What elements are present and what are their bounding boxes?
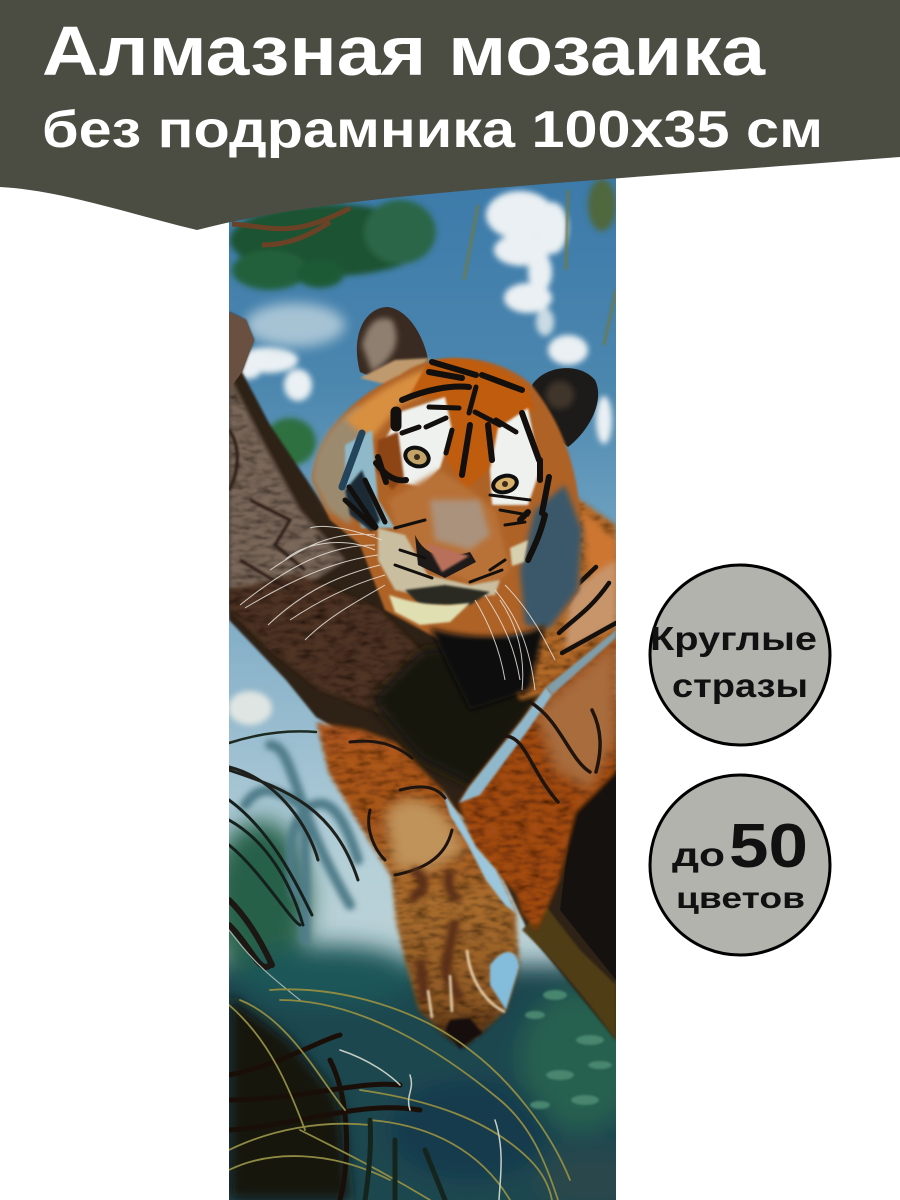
badge: up to 50 colours — [650, 775, 830, 955]
palm fronds — [229, 731, 358, 1000]
foreground brown fronds — [229, 989, 570, 1200]
top foliage — [230, 179, 616, 466]
tiger ears — [357, 307, 598, 447]
upper lip — [378, 528, 500, 600]
orange patch left of eye — [376, 432, 404, 490]
white patches — [345, 397, 540, 528]
distant palm — [245, 745, 358, 940]
nose — [415, 535, 476, 578]
dark left cheek — [345, 470, 380, 532]
chin — [389, 595, 470, 625]
orange forehead — [410, 359, 535, 490]
stripes — [342, 362, 549, 582]
left foreleg and paw — [317, 723, 519, 1048]
grey left mane — [309, 404, 362, 526]
badge: round rhinestones — [650, 565, 830, 745]
tiger head — [312, 358, 582, 710]
trunk — [229, 312, 616, 1040]
jungle backdrop — [229, 803, 616, 1200]
sky — [229, 175, 616, 995]
tiger picture — [229, 178, 616, 1200]
blue right cheek — [520, 485, 582, 628]
header band — [0, 0, 900, 230]
head base — [312, 358, 580, 640]
branches — [232, 208, 350, 245]
badge: up to 50 colours: до — [672, 836, 725, 873]
badge: round rhinestones: стразы — [672, 667, 808, 704]
jungle leaves — [525, 990, 612, 1109]
title line 2: без подрамника 100х35 см — [42, 101, 823, 159]
whiskers — [240, 526, 555, 690]
pale right cheek spot — [510, 540, 528, 566]
muzzle — [388, 470, 510, 590]
badge: up to 50 colours: 50 — [729, 812, 808, 881]
clouds — [228, 191, 612, 725]
eyes — [403, 444, 519, 495]
dark chin gap — [405, 585, 490, 605]
title — [42, 12, 823, 159]
tiger body — [459, 490, 616, 930]
neck shadow — [430, 625, 545, 710]
title line 1: Алмазная мозаика — [42, 12, 766, 90]
badge: round rhinestones: Круглые — [650, 620, 817, 657]
pale sky haze — [245, 303, 345, 347]
badge: up to 50 colours: цветов — [676, 882, 805, 915]
pale orange brow band — [344, 368, 424, 438]
